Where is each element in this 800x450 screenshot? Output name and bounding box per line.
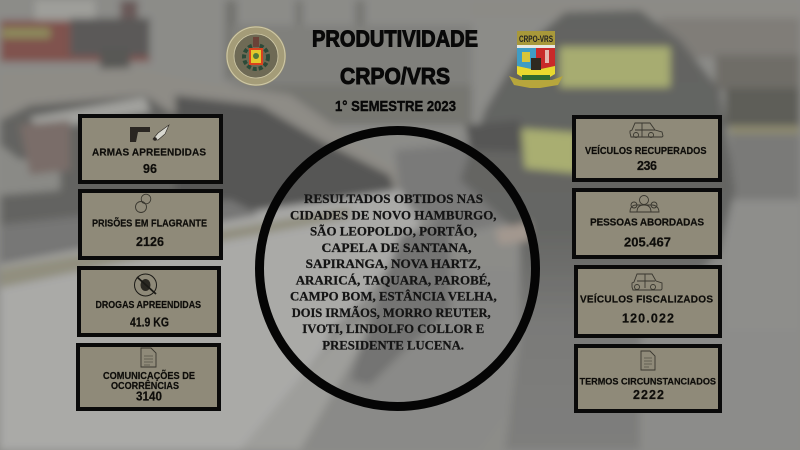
panel: pessoas abordadas xyxy=(574,190,720,257)
icon: handcuffs xyxy=(136,194,151,212)
cities text block: SAPIRANGA, NOVA HARTZ, xyxy=(306,256,481,271)
panel: prisões em flagrante: PRISÕES EM FLAGRANTE xyxy=(92,217,207,230)
cities text block: CAMPO BOM, ESTÂNCIA VELHA, xyxy=(290,289,497,304)
panel: drogas apreendidas xyxy=(79,268,219,335)
panel: comunicações de ocorrências: OCORRÊNCIAS xyxy=(111,379,179,392)
panel: pessoas abordadas: PESSOAS ABORDADAS xyxy=(590,218,704,229)
panel: drogas apreendidas: 41.9 KG xyxy=(130,316,169,330)
cities text block: IVOTI, LINDOLFO COLLOR E xyxy=(302,321,484,336)
panel: prisões em flagrante xyxy=(80,191,221,258)
panel: comunicações de ocorrências: 3140 xyxy=(136,390,162,404)
icon: no drugs xyxy=(134,274,156,296)
panel: armas apreendidas: ARMAS APREENDIDAS xyxy=(92,148,206,158)
panel: veículos recuperados xyxy=(574,117,720,180)
icon: document xyxy=(641,351,655,370)
panel: drogas apreendidas: DROGAS APREENDIDAS xyxy=(96,299,201,311)
icon: car xyxy=(630,123,663,138)
icon: people xyxy=(630,196,659,212)
logo: Brigada Militar badge xyxy=(226,26,286,86)
icon: car xyxy=(632,274,662,290)
panel: termos circunstanciados: 2222 xyxy=(633,388,664,402)
central circle with cities text xyxy=(260,130,536,406)
logo: CRPO-VRS shield: CRPO-VRS xyxy=(519,34,553,44)
cities text block xyxy=(290,191,497,352)
panel: prisões em flagrante: 2126 xyxy=(136,235,164,249)
logo: CRPO-VRS shield xyxy=(509,31,563,88)
panel: comunicações de ocorrências: COMUNICAÇÕES DE xyxy=(103,369,195,382)
panel: veículos fiscalizados xyxy=(576,267,720,336)
panel: comunicações de ocorrências xyxy=(78,345,219,409)
panel: veículos fiscalizados: 120.022 xyxy=(622,312,674,326)
panel: termos circunstanciados: TERMOS CIRCUNSTANCIADOS xyxy=(580,376,716,387)
icon: pistol and knife xyxy=(130,125,169,142)
panel: veículos fiscalizados: VEÍCULOS FISCALIZADOS xyxy=(580,293,713,306)
panel: veículos recuperados: 236 xyxy=(637,159,657,173)
cities text block: ARARICÁ, TAQUARA, PAROBÉ, xyxy=(296,272,491,287)
cities text block: CIDADES DE NOVO HAMBURGO, xyxy=(290,207,496,222)
cities text block: RESULTADOS OBTIDOS NAS xyxy=(304,191,483,206)
cities text block: DOIS IRMÃOS, MORRO REUTER, xyxy=(292,305,491,320)
panel: pessoas abordadas: 205.467 xyxy=(624,236,671,250)
cities text block: SÃO LEOPOLDO, PORTÃO, xyxy=(310,224,477,238)
panel: armas apreendidas: 96 xyxy=(143,162,157,176)
title: CRPO/VRS xyxy=(340,63,450,89)
title: 1° SEMESTRE 2023 xyxy=(335,98,456,115)
panel: veículos recuperados: VEÍCULOS RECUPERADOS xyxy=(585,144,706,157)
icon: document xyxy=(141,348,156,367)
panel: armas apreendidas xyxy=(80,116,221,182)
cities text block: CAPELA DE SANTANA, xyxy=(322,240,472,255)
cities text block: PRESIDENTE LUCENA. xyxy=(322,337,464,352)
panel: termos circunstanciados xyxy=(576,346,720,411)
title: PRODUTIVIDADE xyxy=(312,26,478,52)
title xyxy=(312,26,478,115)
